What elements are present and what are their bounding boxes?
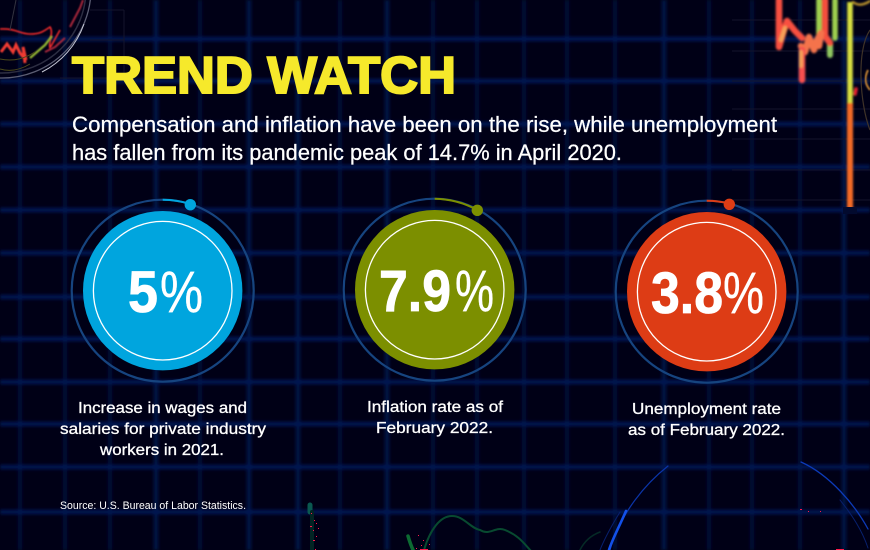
caption: unemployment: as of February 2022. [628,422,785,439]
stat: wages 5%: 5 [128,260,158,325]
caption: unemployment [628,401,785,439]
caption: inflation: Inflation rate as of [367,399,504,416]
intro text [72,112,777,165]
decorative green wave bottom [310,505,600,550]
intro text: has fallen from its pandemic peak of 14.7% in April 2020. [72,140,622,165]
decorative bubble right edge [861,30,870,130]
stat: unemployment 3.8% [616,199,798,383]
decorative bubble bottom right [600,462,868,550]
intro text: Compensation and inflation have been on the rise, while unemployment [72,112,777,137]
stat: inflation 7.9%: 7.9 [379,259,451,324]
caption: inflation: February 2022. [376,420,493,437]
stat: unemployment 3.8%: % [723,261,764,326]
stat: wages 5%: % [160,260,203,325]
title: TREND WATCH [72,47,456,105]
stat: unemployment 3.8%: 3.8 [651,261,723,326]
caption: wages: salaries for private industry [60,421,266,438]
caption: wages [60,400,266,459]
decorative bubble top left [0,0,91,78]
caption: unemployment: Unemployment rate [632,401,781,418]
stat: inflation 7.9% [344,199,526,381]
decorative red specks bottom [310,509,844,550]
caption: wages: workers in 2021. [99,442,224,459]
stat: wages 5% [72,199,254,382]
stat: inflation 7.9%: % [455,259,494,324]
caption: inflation [367,399,504,437]
source note: Source: U.S. Bureau of Labor Statistics. [60,500,246,512]
decorative candlestick chart top right [779,0,870,212]
caption: wages: Increase in wages and [78,400,247,417]
